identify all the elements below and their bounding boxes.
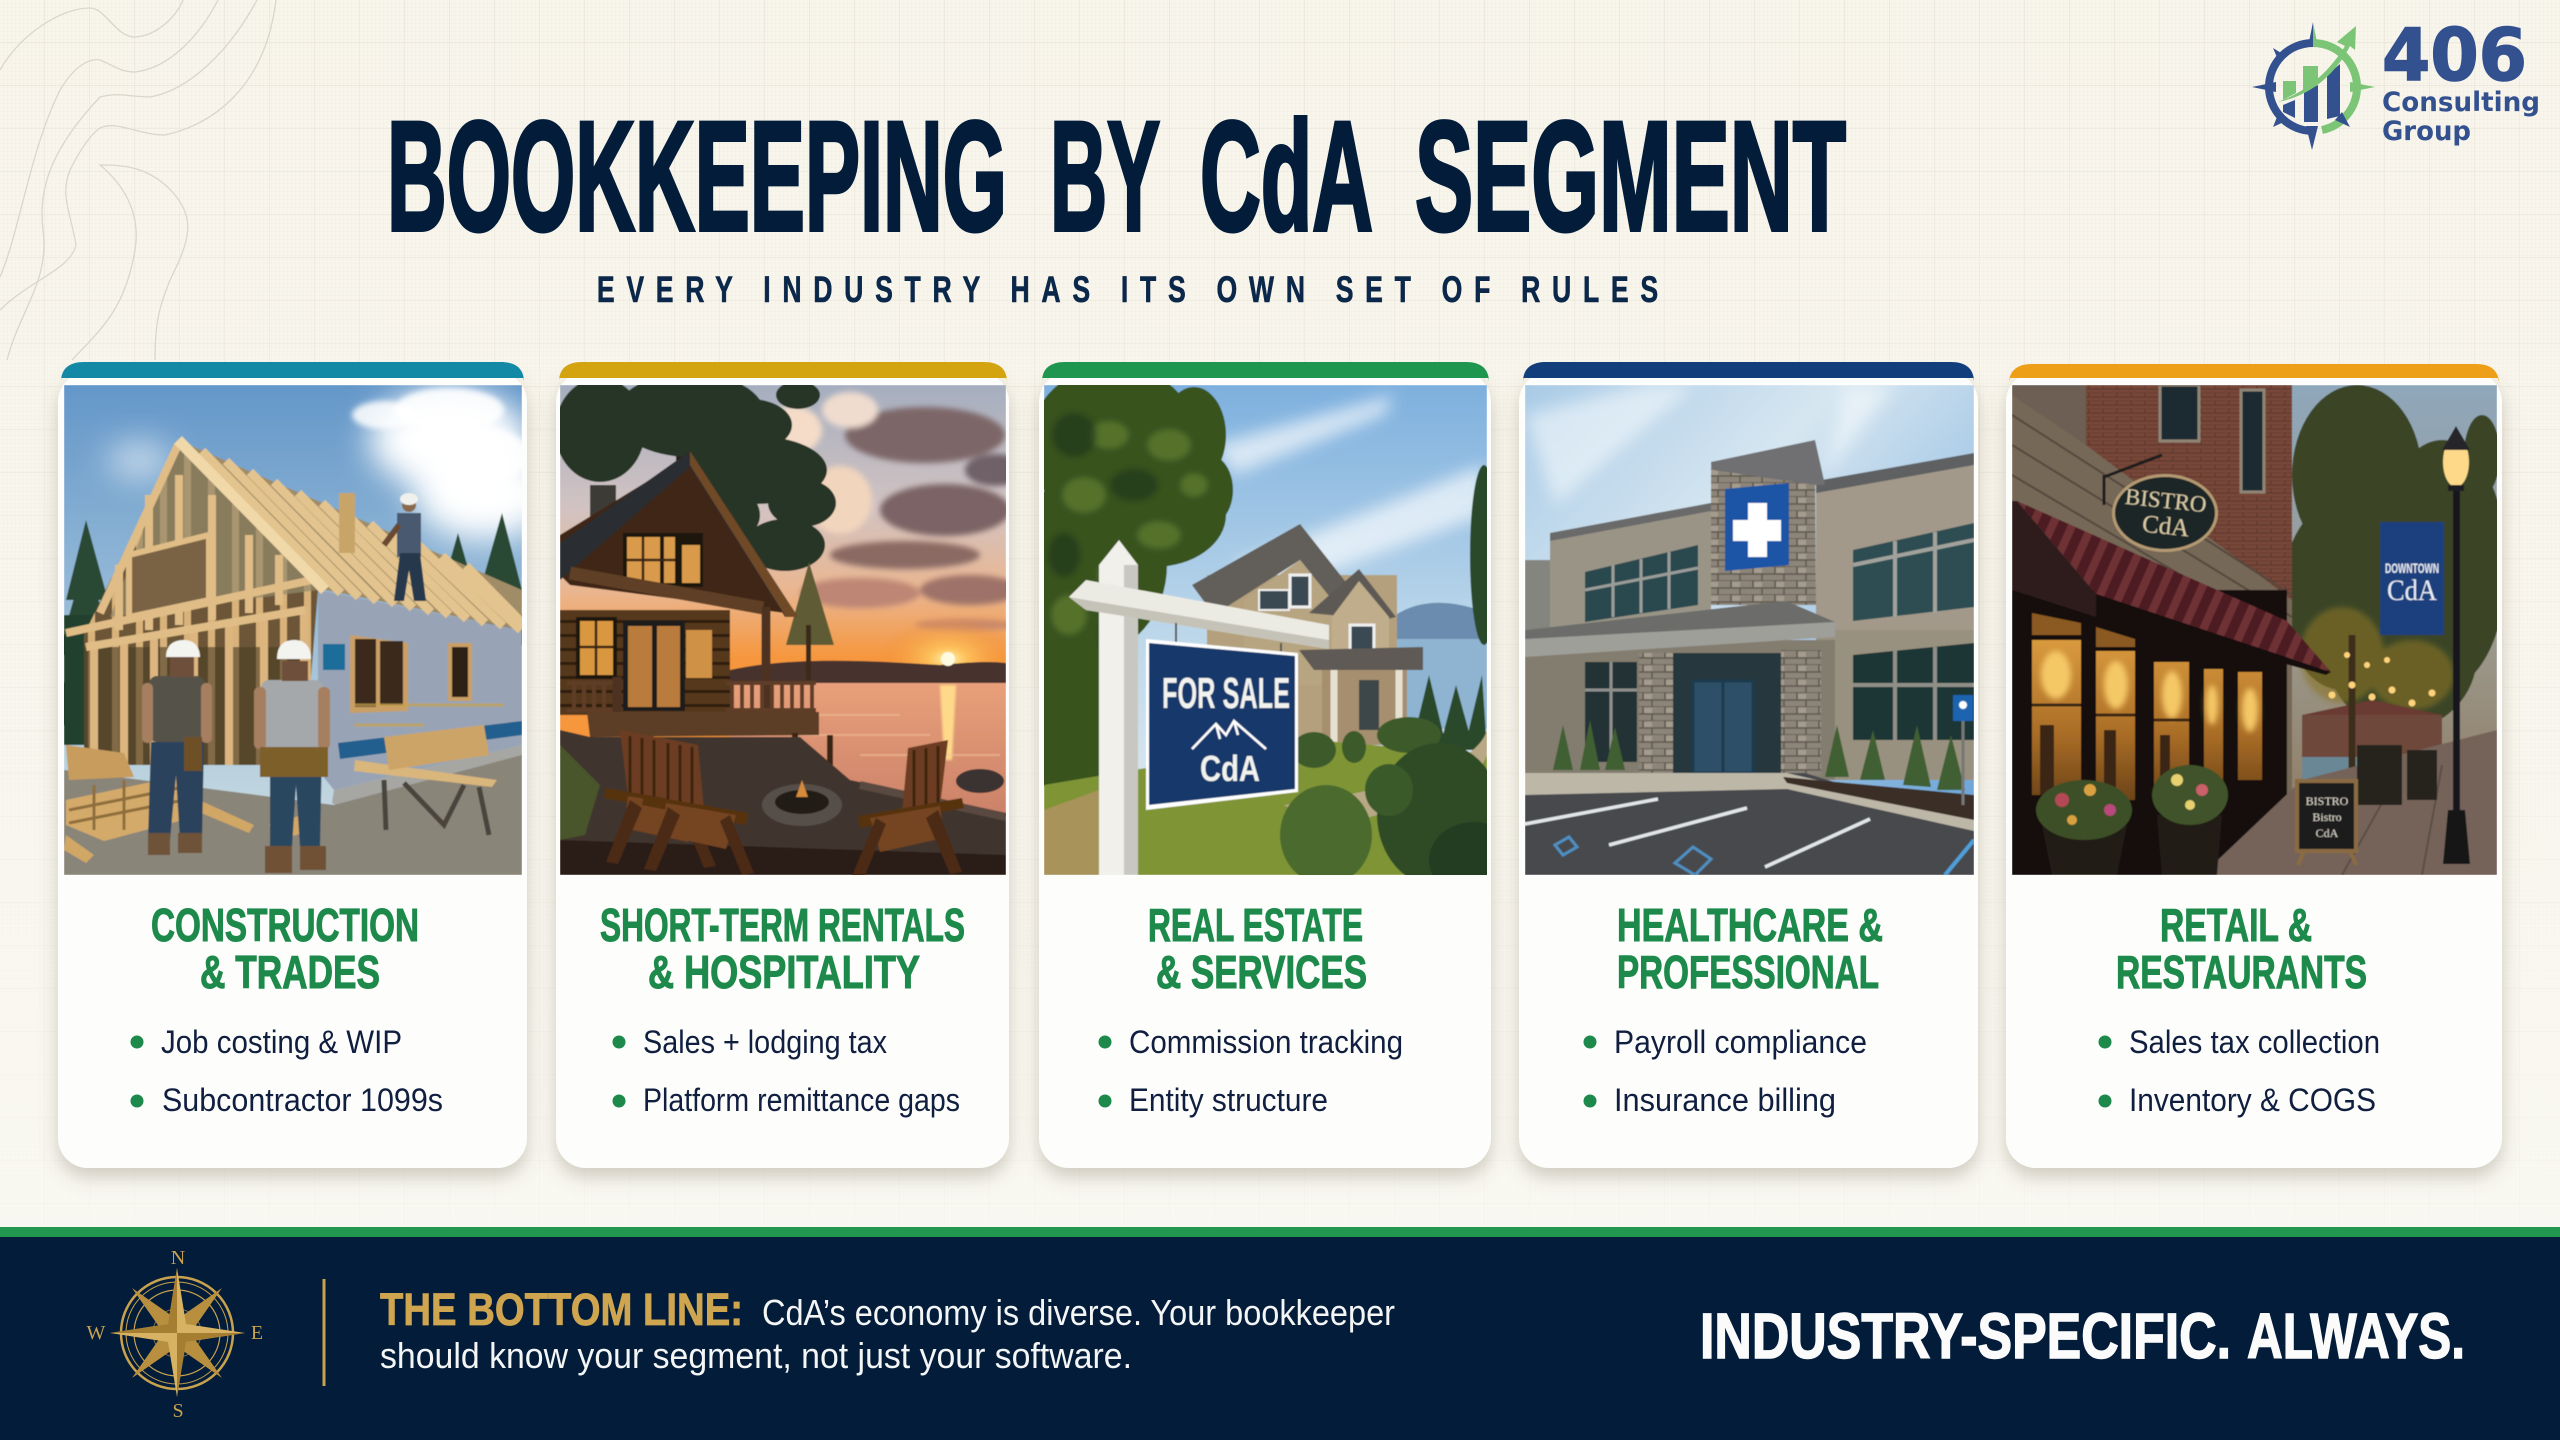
bullet list: Job costing & WIP: [161, 1024, 402, 1060]
footer divider: [322, 1279, 326, 1386]
heading: RESTAURANTS: [2116, 946, 2367, 998]
photo: bistro storefront at dusk: [2012, 385, 2507, 875]
tagline: ALWAYS.: [2247, 1300, 2465, 1372]
photo: for sale sign and house: CdA: [1200, 748, 1260, 789]
bullet list: Commission tracking: [1129, 1024, 1403, 1060]
title: BY: [1050, 90, 1160, 264]
bullet list: [2098, 1024, 2380, 1118]
logo: 406 Consulting Group: [2252, 13, 2540, 150]
bullet list: Insurance billing: [1614, 1082, 1836, 1118]
bottom line text: should know your segment, not just your software.: [380, 1335, 1132, 1376]
heading: REAL ESTATE: [1148, 899, 1363, 951]
card background: [556, 372, 1009, 1168]
logo wordmark: Consulting: [2382, 87, 2540, 118]
title: CdA: [1200, 90, 1373, 264]
panel: retail and restaurants: [2006, 364, 2507, 1168]
bullet list: Subcontractor 1099s: [162, 1082, 443, 1118]
heading: [151, 899, 419, 998]
card accent bar: [1042, 362, 1489, 382]
bullet list: Sales + lodging tax: [643, 1024, 887, 1060]
logo wordmark: 406: [2382, 13, 2527, 97]
heading: [1148, 899, 1367, 998]
heading: [600, 899, 965, 998]
bottom line text: THE BOTTOM LINE:: [380, 1284, 743, 1335]
logo wordmark: Group: [2382, 116, 2471, 147]
title: SEGMENT: [1415, 90, 1846, 264]
heading: [2116, 899, 2367, 998]
heading: & TRADES: [200, 946, 380, 998]
photo: bistro storefront at dusk: CdA: [2316, 826, 2339, 840]
photo: lakeside cabin at sunset: [555, 373, 1025, 878]
icon: gold compass rose: E: [251, 1322, 263, 1344]
bullet list: Platform remittance gaps: [643, 1082, 960, 1118]
heading: RETAIL &: [2160, 899, 2312, 951]
photo: for sale sign and house: FOR SALE: [1162, 669, 1290, 718]
heading: PROFESSIONAL: [1617, 946, 1879, 998]
icon: compass with rising chart: [2252, 22, 2375, 150]
card background: [1519, 372, 1978, 1168]
logo wordmark: [2382, 13, 2540, 147]
card accent bar: [559, 362, 1007, 382]
heading: SHORT-TERM RENTALS: [600, 899, 965, 951]
heading: & SERVICES: [1156, 946, 1367, 998]
card background: [58, 372, 527, 1168]
bottom line text: [380, 1284, 1395, 1376]
photo: bistro storefront at dusk: BISTRO: [2124, 484, 2208, 517]
icon: gold compass rose: W: [87, 1322, 106, 1344]
card accent bar: [61, 362, 524, 382]
bullet list: Sales tax collection: [2129, 1024, 2380, 1060]
subtitle: EVERY INDUSTRY HAS ITS OWN SET OF RULES: [597, 269, 1658, 310]
card background: [2006, 372, 2502, 1168]
panel: short-term rentals and hospitality: [555, 362, 1025, 1168]
panel: real estate and services: [1011, 362, 1519, 1168]
icon: gold compass rose: N: [171, 1247, 185, 1269]
heading: CONSTRUCTION: [151, 899, 419, 951]
icon: gold compass rose: [87, 1247, 263, 1422]
photo: medical office building: [1525, 385, 1974, 875]
icon: gold compass rose: S: [172, 1400, 184, 1422]
photo: bistro storefront at dusk: CdA: [2387, 574, 2437, 607]
card accent bar: [2009, 364, 2499, 384]
photo: house under construction: [52, 385, 554, 875]
heading: HEALTHCARE &: [1617, 899, 1883, 951]
bullet list: [130, 1024, 443, 1118]
heading: & HOSPITALITY: [648, 946, 920, 998]
bullet list: Inventory & COGS: [2129, 1082, 2376, 1118]
photo: bistro storefront at dusk: BISTRO: [2306, 794, 2349, 808]
photo: bistro storefront at dusk: CdA: [2141, 511, 2191, 542]
tagline: INDUSTRY-SPECIFIC.: [1700, 1300, 2231, 1372]
bullet list: [612, 1024, 960, 1118]
photo: bistro storefront at dusk: Bistro: [2312, 810, 2342, 824]
title: BOOKKEEPING: [387, 90, 1007, 264]
bullet list: [1584, 1024, 1867, 1118]
photo: for sale sign and house: [1044, 385, 1487, 875]
card accent bar: [1523, 362, 1974, 382]
bullet list: Entity structure: [1129, 1082, 1328, 1118]
bottom line text: CdA’s economy is diverse. Your bookkeeper: [762, 1292, 1395, 1333]
footer band: [0, 1227, 2560, 1440]
bullet list: Payroll compliance: [1614, 1024, 1867, 1060]
panel: healthcare and professional: [1519, 362, 1978, 1168]
bullet list: [1098, 1024, 1403, 1118]
card background: [1039, 372, 1491, 1168]
heading: [1617, 899, 1883, 998]
panel: construction and trades: [52, 362, 554, 1168]
photo: bistro storefront at dusk: DOWNTOWN: [2385, 560, 2439, 576]
